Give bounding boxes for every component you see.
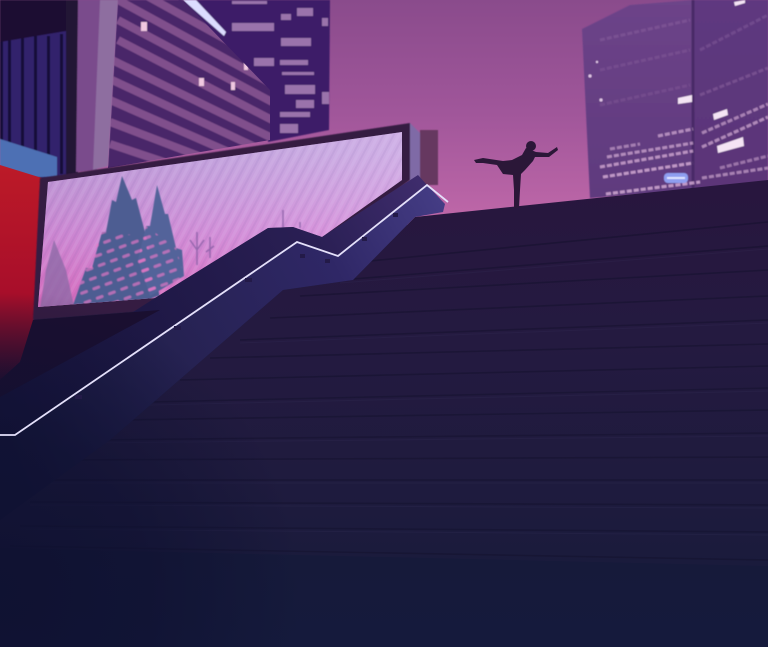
neon handrail bbox=[0, 185, 448, 435]
billboard screen bbox=[38, 132, 402, 307]
ramp top surface bbox=[0, 175, 427, 435]
billboard frame and side box bbox=[33, 123, 438, 320]
ramp wall bbox=[0, 185, 445, 520]
left striped building bbox=[108, 0, 270, 168]
red wall bbox=[0, 165, 42, 380]
forest image bbox=[40, 176, 300, 308]
right tower bbox=[582, 0, 768, 198]
lower left shadow bbox=[0, 290, 300, 647]
stairs bbox=[106, 180, 768, 536]
blue sign bbox=[664, 173, 688, 183]
handrail brackets bbox=[75, 213, 398, 399]
back left tower bbox=[178, 0, 330, 142]
plaza ground bbox=[0, 548, 768, 647]
lit window rows bbox=[600, 15, 768, 194]
dark area under billboard bbox=[0, 310, 160, 397]
sky bbox=[0, 0, 768, 225]
far left dark structure bbox=[0, 0, 118, 180]
dancer silhouette bbox=[474, 141, 558, 208]
stair courses bbox=[170, 222, 768, 506]
